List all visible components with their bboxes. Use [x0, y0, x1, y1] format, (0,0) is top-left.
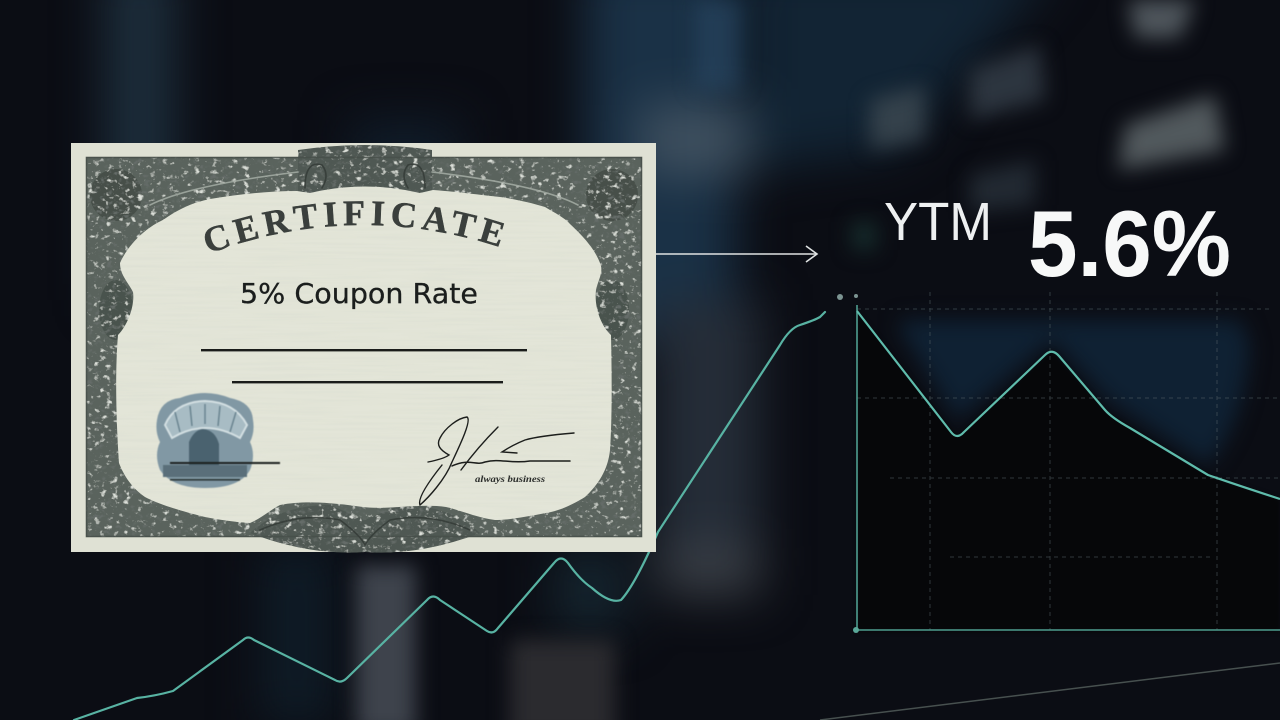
- certificate heading: [204, 201, 504, 251]
- yield line: [857, 311, 1280, 499]
- signature caption: always business: [475, 474, 546, 484]
- panel: certificate: [71, 143, 656, 553]
- axis origin dot: [853, 627, 859, 633]
- arrow: certificate to YTM: [656, 246, 817, 262]
- icon: blue seal: [156, 393, 280, 488]
- YTM value: 5.6%: [1028, 191, 1231, 296]
- chart: rising teal line: [74, 312, 825, 720]
- coupon rate text: 5% Coupon Rate: [240, 277, 478, 310]
- chart axes: [857, 305, 1280, 630]
- top markers: [837, 294, 858, 300]
- chart backdrop: navy glow above the line: [900, 320, 1250, 465]
- certificate signature lines: [201, 349, 527, 383]
- chart backdrop: black below the line: [857, 311, 1280, 632]
- signature: [420, 417, 574, 505]
- chart grid: [857, 292, 1280, 630]
- chart: YTM panel: [837, 292, 1280, 633]
- certificate cream interior: [116, 186, 612, 523]
- certificate paper: [71, 143, 656, 552]
- baseline diagonal: [820, 663, 1280, 720]
- certificate ornamental border: [86, 145, 642, 553]
- border scrollwork: [86, 158, 642, 545]
- YTM label: YTM: [884, 192, 992, 252]
- certificate heading: CERTIFICATE: [204, 201, 504, 251]
